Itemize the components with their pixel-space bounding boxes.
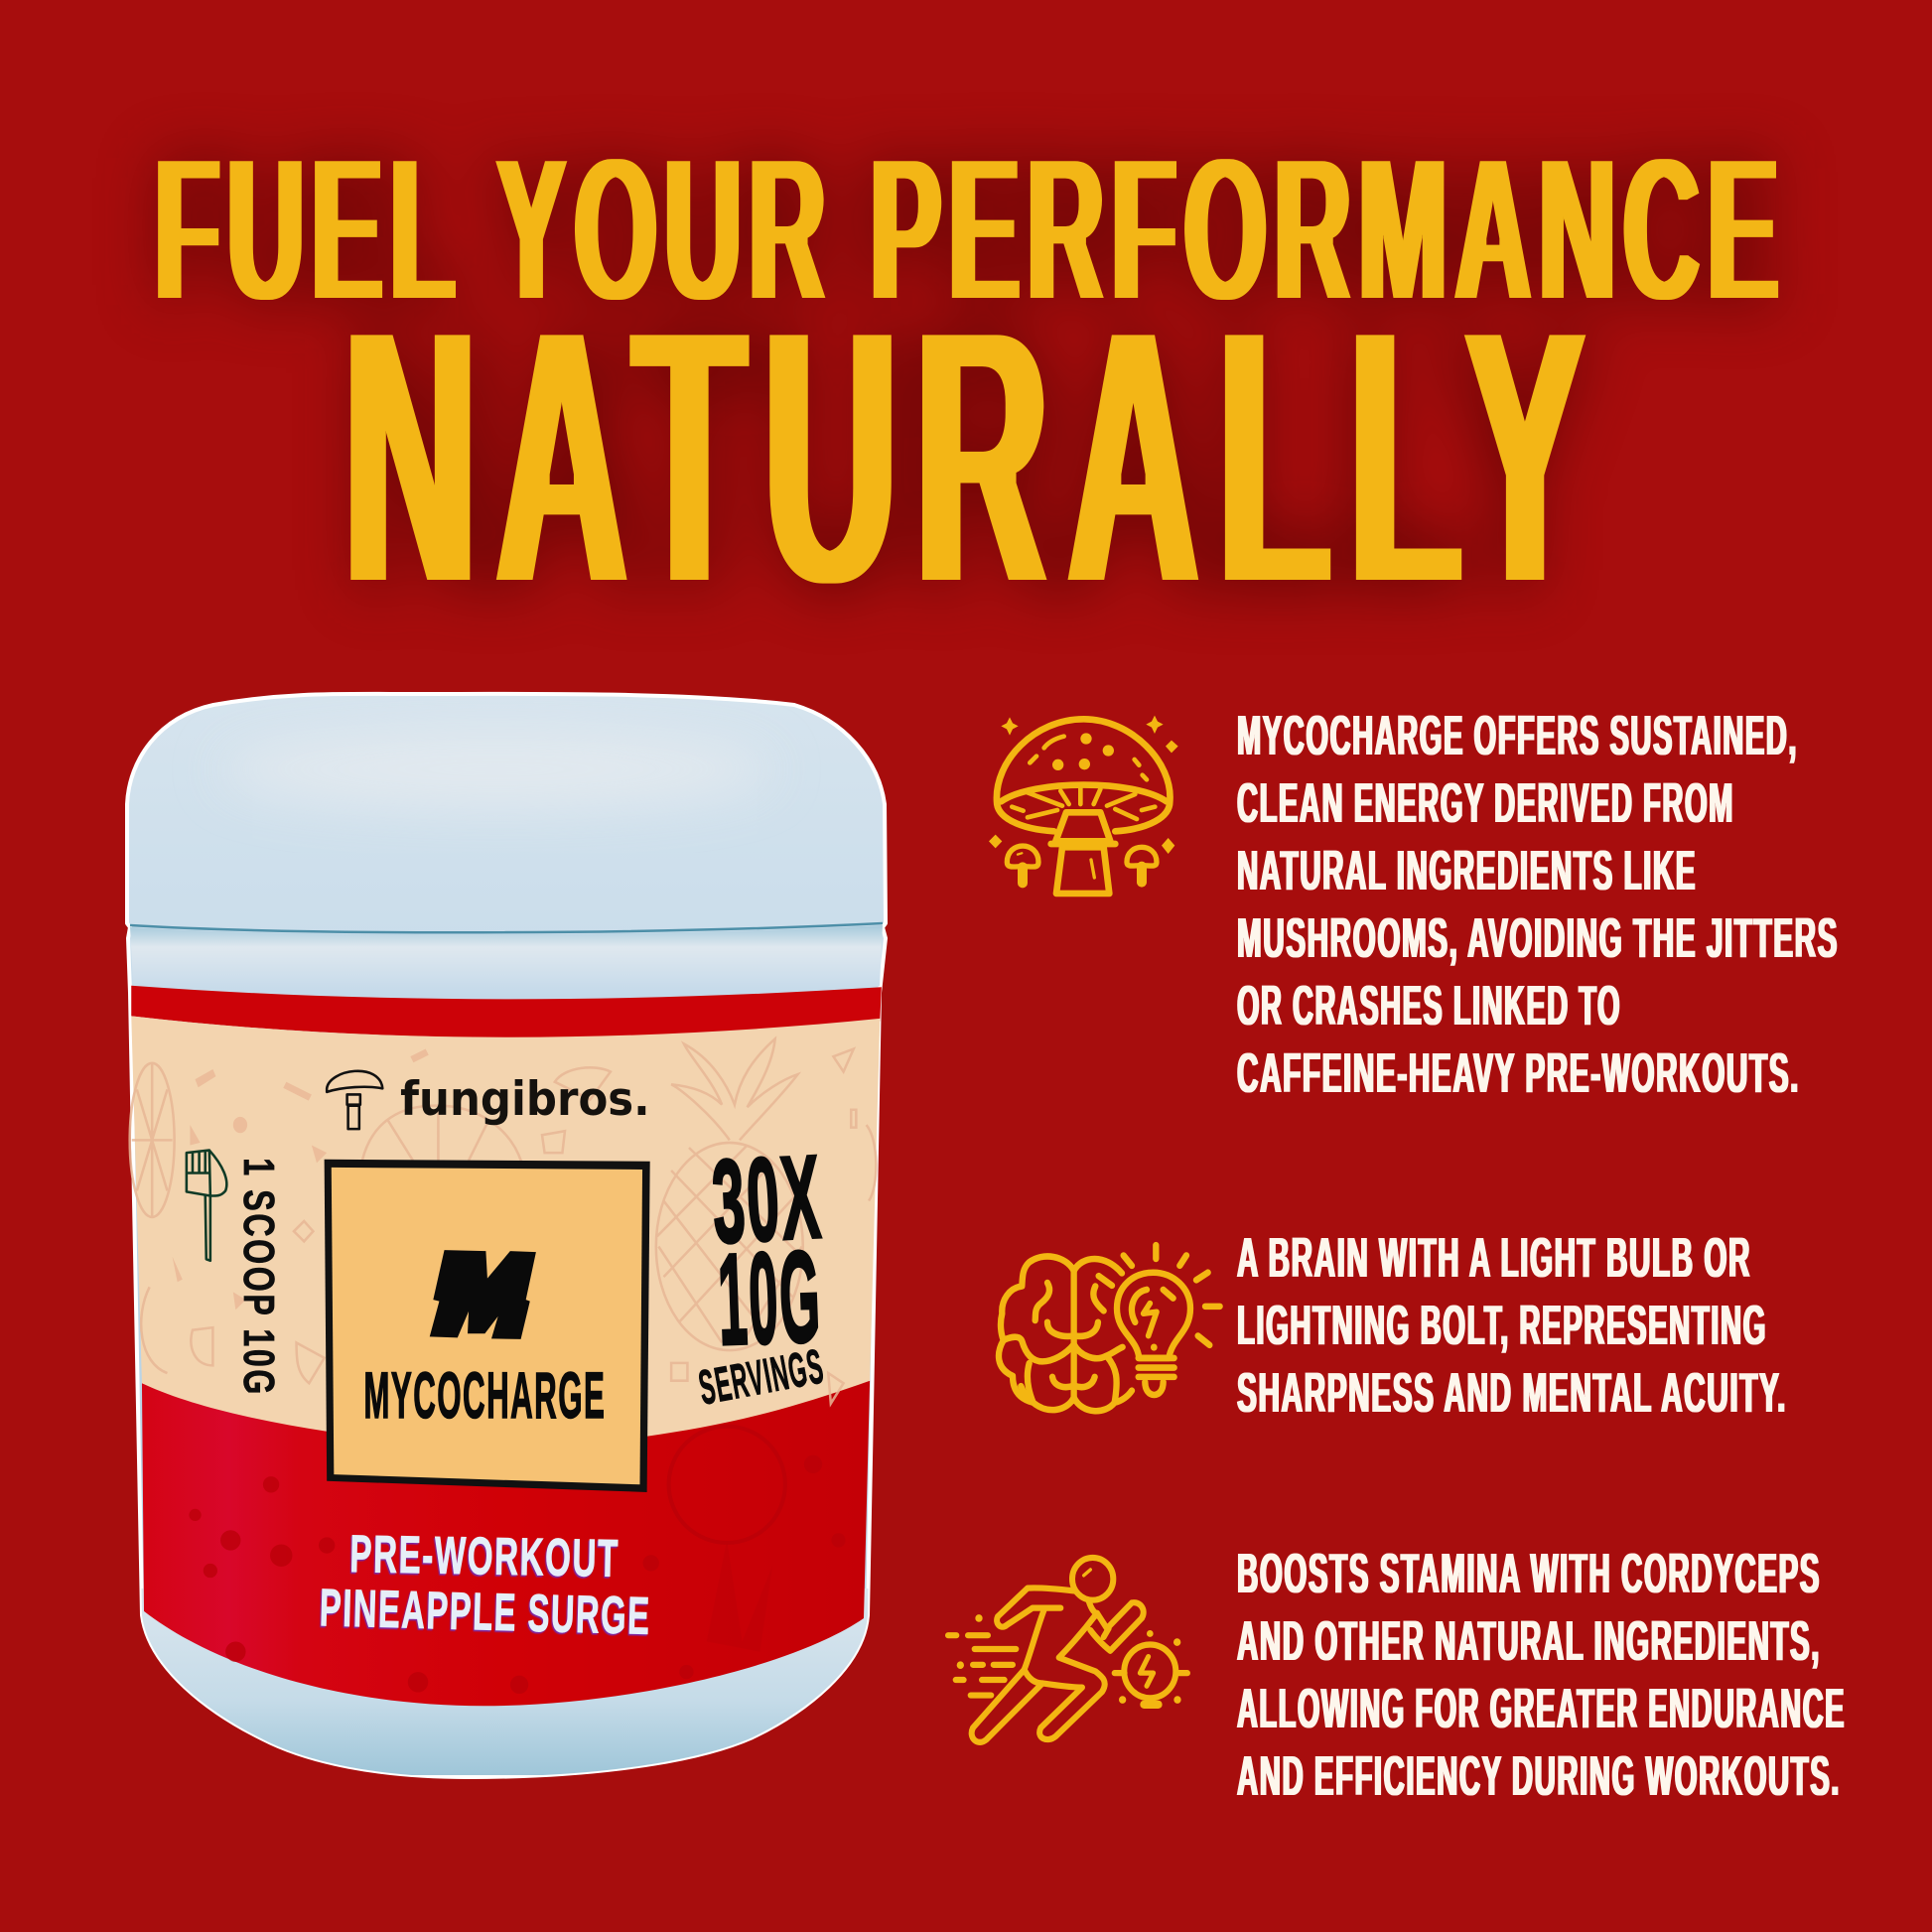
servings count: 30X: [709, 1132, 825, 1268]
brand name: fungibros.: [400, 1072, 650, 1127]
flavour text: PINEAPPLE SURGE: [319, 1579, 651, 1646]
title glow: [155, 123, 1778, 654]
bottom base: [129, 1588, 884, 1775]
benefit text 1: [1237, 704, 1839, 1105]
red lower band: [142, 1381, 870, 1706]
icon: brain with light bulb: [999, 1245, 1220, 1411]
product name box: MYCOCHARGE: [363, 1359, 606, 1433]
jar silhouette and lid: [127, 694, 886, 1777]
body: [997, 1587, 1074, 1627]
benefit text 2: [1237, 1226, 1787, 1425]
red band pattern: [189, 1427, 846, 1694]
scoop icon: [187, 1151, 226, 1261]
benefit text 3: [1237, 1542, 1846, 1808]
rays: [1124, 1245, 1220, 1345]
icon: mushroom: [989, 716, 1178, 894]
lid seam: [130, 923, 883, 932]
flavour text: [319, 1525, 651, 1646]
beige band: [131, 1016, 880, 1437]
title: [155, 114, 1786, 664]
bulb: [1117, 1273, 1190, 1358]
brain: [999, 1256, 1132, 1411]
head: [1072, 1558, 1113, 1600]
energy bulb: [1124, 1645, 1175, 1698]
small mushrooms: [1007, 846, 1038, 867]
label artwork: [130, 986, 882, 1706]
icon: runner with energy bulb: [948, 1558, 1187, 1742]
label artwork: SERVINGS: [695, 1339, 828, 1416]
lid highlight: [256, 735, 737, 810]
lid collar: [130, 925, 883, 998]
product name box: [325, 1160, 650, 1492]
speed lines: [948, 1635, 1016, 1696]
pineapple pattern: [130, 1038, 876, 1404]
red top stripe: [131, 986, 882, 1037]
label artwork: 10G: [716, 1223, 824, 1372]
brand mushroom icon: [327, 1071, 382, 1129]
flavour text: PRE-WORKOUT: [349, 1525, 620, 1588]
scoop text: 1 SCOOP 10G: [234, 1158, 283, 1397]
product jar: [127, 694, 886, 1777]
M logo: [430, 1250, 536, 1339]
servings count: [695, 1132, 828, 1416]
